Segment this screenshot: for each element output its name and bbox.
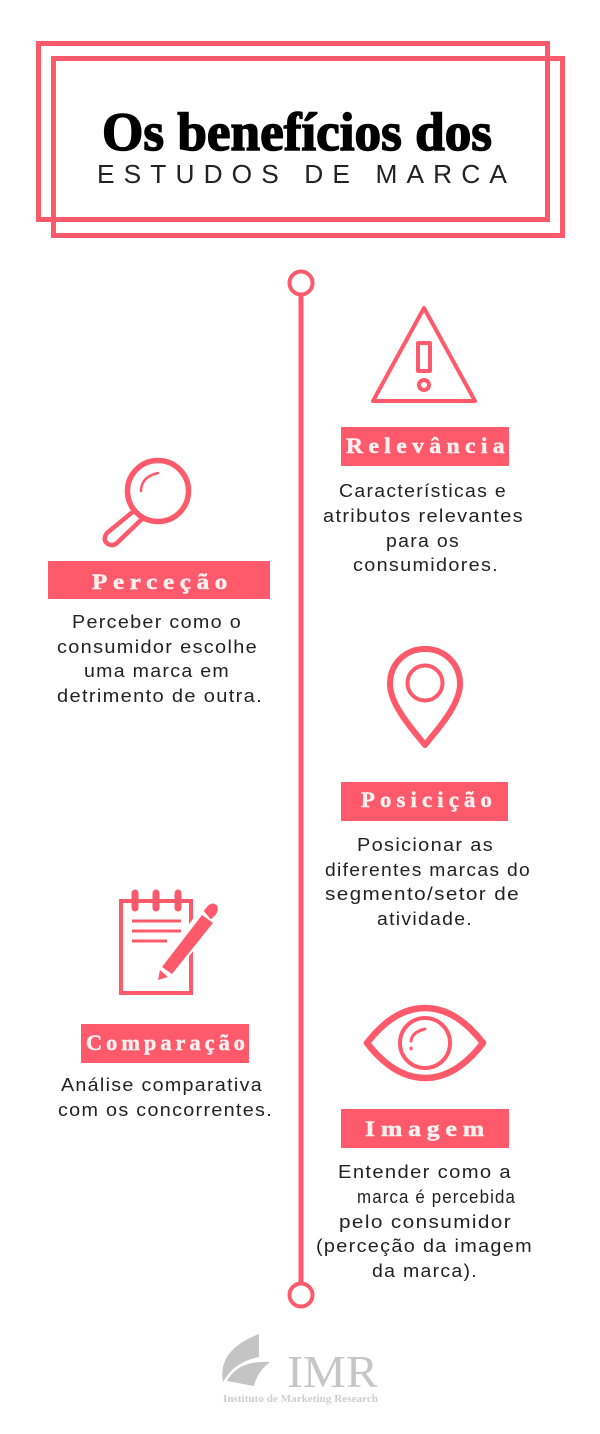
text: Perceção description: Perceber como o [72,612,242,632]
text: Imagem description: pelo consumidor [339,1212,512,1232]
text: Relevância description: consumidores. [353,555,499,575]
label: Posicição [341,782,508,821]
text: Posição description: diferentes marcas do [325,860,531,880]
subtitle: ESTUDOS DE MARCA [97,159,516,189]
label: Comparação [81,1024,249,1063]
icon: magnifying glass [105,460,188,545]
label: Posicição: Posicição [361,787,497,812]
text: Posição description: Posicionar as [357,835,494,855]
front frame [54,58,562,236]
panel: Perceção [48,460,270,706]
text: Perceção description [57,612,263,706]
icon: warning triangle [373,308,475,401]
icon: map pin [390,649,460,745]
panel: Posição [325,649,531,929]
timeline [290,272,312,1306]
label: Comparação: Comparação [86,1030,249,1055]
label: Perceção [48,561,270,599]
text: Imagem description [316,1162,533,1281]
icon: logo leaves [222,1334,270,1386]
back frame [38,44,548,220]
panel: Imagem [316,1008,533,1281]
text: Imagem description: (perceção da imagem [316,1236,533,1256]
text: Perceção description: detrimento de outra. [57,686,263,706]
label: Imagem: Imagem [365,1116,490,1141]
label: Relevância: Relevância [346,433,510,458]
text: Imagem description: Entender como a [338,1162,512,1182]
text: Relevância description: para os [386,531,460,551]
logo tagline: Instituto de Marketing Research [223,1394,378,1405]
text: Relevância description: atributos relevantes [323,506,524,526]
header panel [38,44,562,236]
icon: eye [367,1008,483,1078]
text: Relevância description [323,481,524,575]
panel: Relevância [323,308,524,575]
text: Posição description: atividade. [377,909,473,929]
logo name: IMR [287,1346,378,1397]
title: Os benefícios dos [102,102,492,162]
text: Comparação description [58,1075,273,1120]
text: Relevância description: Características e [339,481,507,501]
text: Comparação description: com os concorrentes. [58,1100,273,1120]
text: Posição description [325,835,531,929]
text: Perceção description: consumidor escolhe [57,637,258,657]
text: Comparação description: Análise comparativa [61,1075,263,1095]
text: Perceção description: uma marca em [84,661,230,681]
text: Imagem description: da marca). [372,1261,478,1281]
label: Imagem [341,1109,509,1148]
panel: Comparação [58,893,273,1120]
label: Relevância [341,427,510,466]
logo: IMR [222,1334,378,1405]
text: Imagem description: marca é percebida [357,1187,516,1207]
icon: notepad and pencil [121,893,217,993]
text: Posição description: segmento/setor de [325,884,520,904]
label: Perceção: Perceção [92,569,233,594]
